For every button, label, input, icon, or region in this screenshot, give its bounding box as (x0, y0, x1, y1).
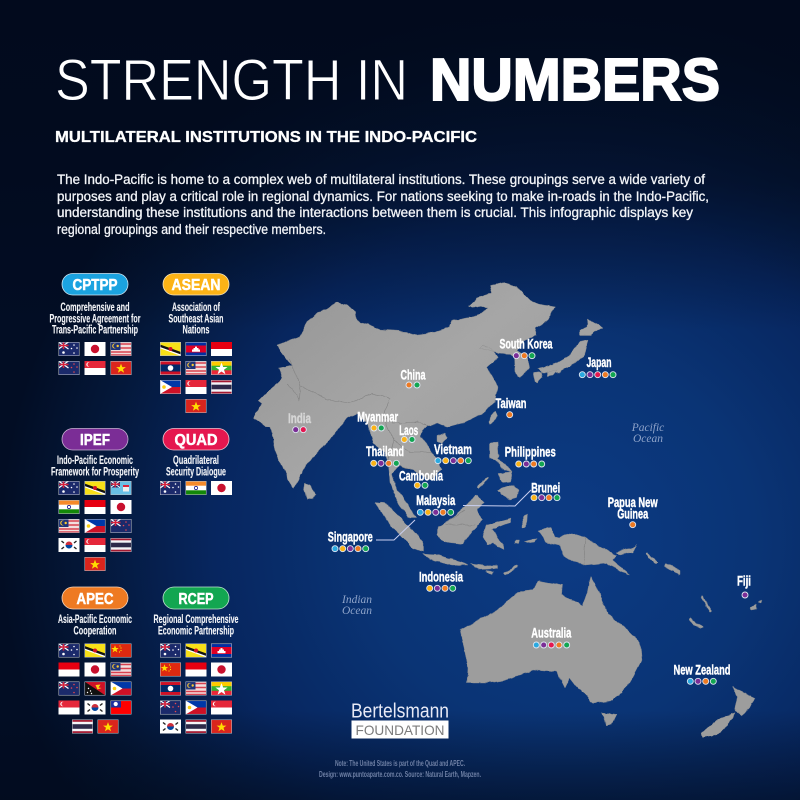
caption: IPEF (51, 455, 139, 478)
country: Australia (531, 626, 572, 648)
land: Java and Lesser Sunda (423, 554, 518, 575)
pill: CPTPP: CPTPP (72, 277, 118, 294)
country: Vietnam (434, 442, 472, 464)
flags: APEC members (58, 644, 132, 734)
pill: RCEP (163, 587, 229, 609)
caption: QUAD (166, 455, 226, 478)
country: Cambodia (399, 468, 443, 488)
intro paragraph (57, 172, 709, 237)
footer note (319, 759, 481, 779)
ocean label: Pacific Ocean: Pacific (631, 422, 664, 434)
country: Papua New Guinea: Guinea (617, 506, 649, 522)
flags: RCEP members (160, 644, 232, 734)
panel: QUAD (160, 428, 232, 495)
land: Tasmania (602, 713, 617, 725)
country: Philippines: Philippines (505, 444, 556, 460)
country: South Korea (500, 336, 553, 359)
country: Japan (579, 355, 616, 378)
intro paragraph: purposes and play a critical role in regional dynamics. For nations seeking to make in-roads in the Indo-Pacific, (57, 189, 709, 204)
caption: RCEP: Regional Comprehensive (154, 614, 238, 626)
country: Indonesia (419, 570, 463, 591)
country: Brunei (531, 480, 560, 501)
flags: IPEF members (58, 481, 132, 571)
country: Vietnam: Vietnam (434, 442, 472, 457)
footer note: Design: www.puntoaparte.com.co. Source: Natural Earth, Mapzen. (319, 770, 481, 779)
caption: RCEP: Economic Partnership (158, 626, 234, 638)
panel: CPTPP (50, 274, 141, 375)
country: Thailand (366, 444, 404, 466)
land: New Guinea (538, 528, 630, 575)
caption: ASEAN: Association of (172, 302, 220, 314)
land: Melanesian islands (617, 545, 762, 628)
caption: APEC: Cooperation (74, 626, 116, 638)
country: Malaysia (416, 493, 456, 515)
land: Australia (460, 576, 642, 703)
land: Borneo (438, 495, 485, 544)
land: Japan (533, 319, 603, 383)
panel: APEC (58, 587, 132, 734)
country: China (400, 368, 426, 388)
panel: IPEF (51, 428, 139, 571)
flags: QUAD members (160, 481, 232, 495)
caption: IPEF: Framework for Prosperity (51, 466, 139, 478)
pill: APEC (62, 587, 128, 609)
map: land masses (253, 282, 762, 738)
title: STRENGTH IN (55, 48, 408, 113)
caption: CPTPP: Progressive Agreement for (50, 314, 141, 326)
logo: Bertelsmann Foundation: Bertelsmann (351, 700, 449, 722)
country: Japan: Japan (586, 355, 612, 370)
country: Cambodia: Cambodia (399, 468, 443, 484)
country: Papua New Guinea: Papua New (608, 495, 658, 510)
country: Myanmar (357, 410, 399, 431)
leader line: Brunei (463, 490, 531, 506)
footer note: Note: The United States is part of the Quad and APEC. (335, 759, 465, 768)
country: Singapore: Singapore (328, 530, 373, 544)
intro paragraph: The Indo-Pacific is home to a complex web of multilateral institutions. These groupings serve a wide variety of (57, 172, 705, 187)
caption: IPEF: Indo-Pacific Economic (57, 455, 133, 467)
country: Brunei: Brunei (531, 480, 560, 496)
caption: APEC (58, 614, 132, 638)
country: India (288, 411, 311, 433)
country: New Zealand (674, 662, 730, 684)
country: Laos: Laos (399, 423, 418, 438)
logo: Bertelsmann Foundation: FOUNDATION (356, 722, 444, 738)
land: mainland Asia (253, 282, 555, 518)
subtitle: MULTILATERAL INSTITUTIONS IN THE INDO-PACIFIC (55, 129, 477, 146)
pill: QUAD: QUAD (174, 432, 218, 449)
title (55, 47, 720, 113)
country: Thailand: Thailand (366, 444, 404, 459)
pill: RCEP: RCEP (178, 591, 214, 608)
country: Laos (399, 423, 418, 442)
caption: QUAD: Quadrilateral (173, 455, 219, 467)
caption: ASEAN: Nations (182, 324, 210, 336)
country: China: China (400, 368, 426, 382)
country: Indonesia: Indonesia (419, 570, 463, 584)
leader line: Singapore (376, 520, 415, 540)
land: Moluccas (515, 515, 537, 544)
caption: CPTPP: Trans-Pacific Partnership (52, 324, 138, 336)
title: NUMBERS (430, 47, 720, 113)
pill: APEC: APEC (76, 591, 114, 608)
caption: ASEAN: Southeast Asian (168, 314, 224, 326)
country: Fiji (737, 574, 751, 598)
pill: IPEF (62, 428, 128, 450)
caption: QUAD: Security Dialogue (166, 466, 226, 478)
land: Sri Lanka (304, 483, 315, 499)
country: Taiwan (496, 396, 526, 418)
flags: CPTPP members (58, 342, 132, 375)
country: Singapore (328, 530, 373, 552)
flags: ASEAN members (160, 342, 232, 413)
caption: APEC: Asia-Pacific Economic (58, 614, 132, 626)
intro paragraph: understanding these institutions and the interactions between them is crucial. This infographic displays key (57, 205, 693, 220)
country: South Korea: South Korea (500, 336, 553, 352)
pill: IPEF: IPEF (80, 432, 110, 449)
country: Myanmar: Myanmar (357, 410, 399, 424)
country: Taiwan: Taiwan (496, 396, 526, 411)
panel: ASEAN (160, 274, 232, 413)
caption: CPTPP: Comprehensive and (60, 302, 130, 314)
land: Sulawesi (483, 518, 512, 550)
country: India: India (288, 411, 311, 426)
caption: RCEP (154, 614, 238, 638)
caption: CPTPP (50, 302, 141, 336)
logo: Bertelsmann Foundation (351, 700, 449, 738)
country: Fiji: Fiji (737, 574, 751, 588)
caption: ASEAN (168, 302, 224, 336)
pill: ASEAN: ASEAN (172, 277, 220, 294)
map: border lines (288, 358, 585, 565)
country: Papua New Guinea (608, 495, 658, 528)
land: Sumatra (375, 502, 423, 552)
intro paragraph: regional groupings and their respective members. (57, 222, 326, 237)
country: Malaysia: Malaysia (416, 493, 456, 508)
land: New Zealand (702, 685, 755, 738)
panel: RCEP (154, 587, 238, 734)
land: Taiwan (489, 411, 497, 425)
country: Australia: Australia (531, 626, 572, 640)
ocean label: Indian Ocean: Indian (341, 594, 372, 606)
country: Philippines (505, 444, 556, 467)
country: New Zealand: New Zealand (674, 662, 730, 678)
ocean label: Pacific Ocean: Ocean (633, 433, 663, 445)
ocean label: Indian Ocean: Ocean (342, 605, 372, 617)
land: Hainan (437, 433, 448, 443)
land: Philippines (477, 442, 519, 500)
